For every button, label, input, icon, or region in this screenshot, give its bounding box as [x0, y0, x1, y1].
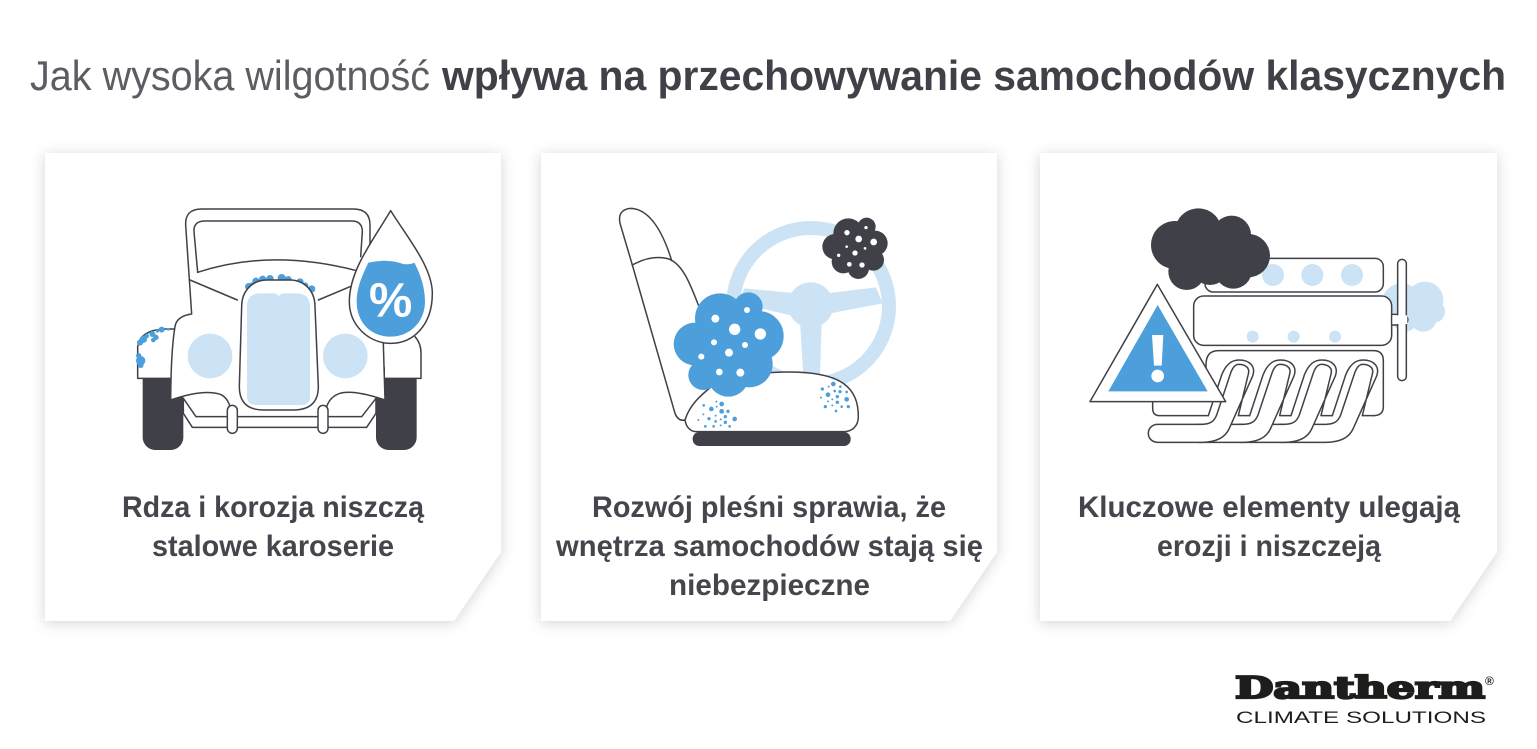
warning triangle [1090, 284, 1226, 402]
caption: erosion [1078, 491, 1461, 563]
title: wpływa na przechowywanie samochodów klasycznych [441, 52, 1506, 99]
title: Jak wysoka wilgotność [30, 52, 430, 99]
caption: erosion: Kluczowe elementy ulegają [1078, 491, 1461, 524]
dark smoke cloud [1151, 208, 1270, 290]
caption: rust [122, 491, 425, 563]
logo: Dantherm: ® [1485, 674, 1494, 688]
caption: mould: wnętrza samochodów stają się [555, 530, 983, 563]
steering wheel [733, 228, 889, 384]
caption: erosion: erozji i niszczeją [1157, 530, 1382, 563]
logo: Dantherm: CLIMATE SOLUTIONS [1236, 709, 1486, 727]
icon: car seat, steering wheel and mould [620, 208, 889, 446]
exhaust manifold [1148, 360, 1378, 442]
engine top cover [1205, 258, 1383, 292]
logo: Dantherm: Dantherm [1235, 671, 1485, 706]
caption: mould: Rozwój pleśni sprawia, że [592, 491, 946, 524]
light cloud behind fan [1382, 282, 1445, 332]
blue mould cloud [674, 292, 784, 397]
caption: rust: Rdza i korozja niszczą [122, 491, 425, 524]
panel: erosion of key components [1040, 153, 1497, 621]
icon: humidity drop: % [369, 274, 412, 328]
panel: mould growth [541, 153, 997, 621]
panel: rust and corrosion [45, 153, 501, 621]
mould spores on seat [697, 382, 850, 428]
icon: humidity drop [349, 211, 432, 343]
caption: mould [555, 491, 983, 602]
engine lower block [1153, 351, 1383, 416]
caption: rust: stalowe karoserie [152, 530, 394, 563]
rust on grille [245, 274, 315, 293]
caption: mould: niebezpieczne [669, 569, 870, 602]
icon: classic car with humidity drop [136, 209, 432, 450]
rust on fender [136, 327, 170, 368]
logo: Dantherm [1235, 671, 1494, 727]
dark mould cloud [822, 218, 888, 279]
fan shaft [1392, 259, 1408, 381]
icon: engine with warning triangle [1090, 208, 1445, 442]
engine middle block [1194, 296, 1392, 345]
